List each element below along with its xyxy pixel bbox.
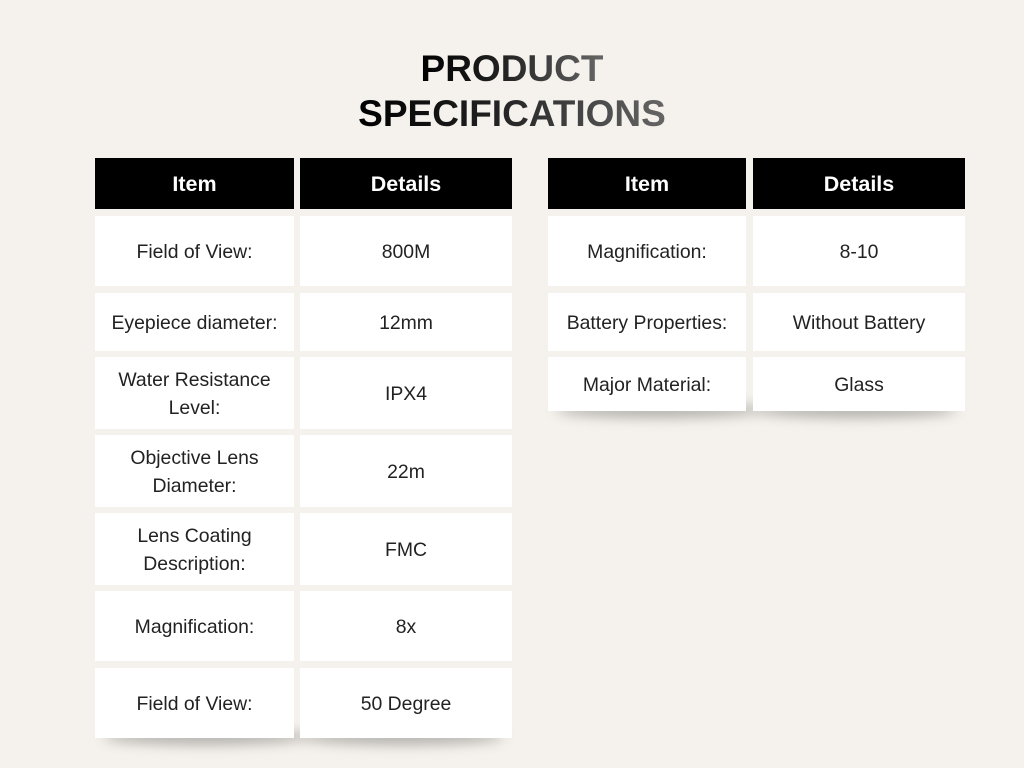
cell: eyepiece diameter value: 12mm xyxy=(379,312,433,334)
title xyxy=(358,48,666,134)
header: details xyxy=(753,158,965,209)
cell: material label xyxy=(548,357,746,411)
cell: material label: Major Material: xyxy=(583,374,711,396)
shadow under left table xyxy=(103,726,504,752)
header: item: Item xyxy=(172,172,217,196)
cell: field of view label (second) xyxy=(95,668,294,738)
cell: material value: Glass xyxy=(834,374,884,396)
panel: right specifications table xyxy=(548,158,965,411)
cell: objective lens value xyxy=(300,435,512,507)
cell: field of view label (second): Field of View: xyxy=(136,693,253,715)
header: item: Item xyxy=(625,172,669,196)
cell: magnification label: Magnification: xyxy=(587,241,707,263)
cell: water resistance value: IPX4 xyxy=(385,383,427,405)
header: item xyxy=(548,158,746,209)
cell: magnification label xyxy=(548,216,746,286)
cell: objective lens label: Diameter: xyxy=(152,475,237,497)
title: SPECIFICATIONS xyxy=(358,93,666,134)
cell: lens coating value xyxy=(300,513,512,585)
cell: objective lens value: 22m xyxy=(387,461,425,483)
shadow under right table xyxy=(556,399,957,424)
cell: eyepiece diameter value xyxy=(300,293,512,351)
cell: field of view value xyxy=(300,216,512,286)
cell: lens coating label: Description: xyxy=(143,553,246,575)
cell: water resistance label: Level: xyxy=(169,397,220,419)
cell: water resistance label xyxy=(95,357,294,429)
cell: eyepiece diameter label xyxy=(95,293,294,351)
cell: field of view label xyxy=(95,216,294,286)
cell: magnification label: Magnification: xyxy=(135,616,254,638)
cell: magnification label xyxy=(95,591,294,661)
header: item xyxy=(95,158,294,209)
cell: water resistance value xyxy=(300,357,512,429)
header: details: Details xyxy=(824,172,894,196)
header: details xyxy=(300,158,512,209)
cell: field of view value: 800M xyxy=(382,241,430,263)
cell: material value xyxy=(753,357,965,411)
cell: battery label: Battery Properties: xyxy=(567,312,727,334)
cell: objective lens label: Objective Lens xyxy=(130,447,259,469)
cell: field of view value (degrees) xyxy=(300,668,512,738)
title: PRODUCT xyxy=(421,48,603,89)
header: details: Details xyxy=(371,172,441,196)
cell: battery value: Without Battery xyxy=(793,312,925,334)
cell: battery value xyxy=(753,293,965,351)
cell: objective lens label xyxy=(95,435,294,507)
cell: magnification value: 8-10 xyxy=(840,241,878,263)
cell: battery label xyxy=(548,293,746,351)
cell: lens coating label: Lens Coating xyxy=(137,525,252,547)
cell: magnification value: 8x xyxy=(396,616,416,638)
cell: lens coating value: FMC xyxy=(385,539,427,561)
cell: field of view value (degrees): 50 Degree xyxy=(361,693,451,715)
cell: magnification value xyxy=(300,591,512,661)
panel: left specifications table xyxy=(95,158,512,738)
cell: eyepiece diameter label: Eyepiece diameter: xyxy=(112,312,278,334)
cell: lens coating label xyxy=(95,513,294,585)
cell: water resistance label: Water Resistance xyxy=(118,369,271,391)
cell: field of view label: Field of View: xyxy=(136,241,253,263)
cell: magnification value xyxy=(753,216,965,286)
